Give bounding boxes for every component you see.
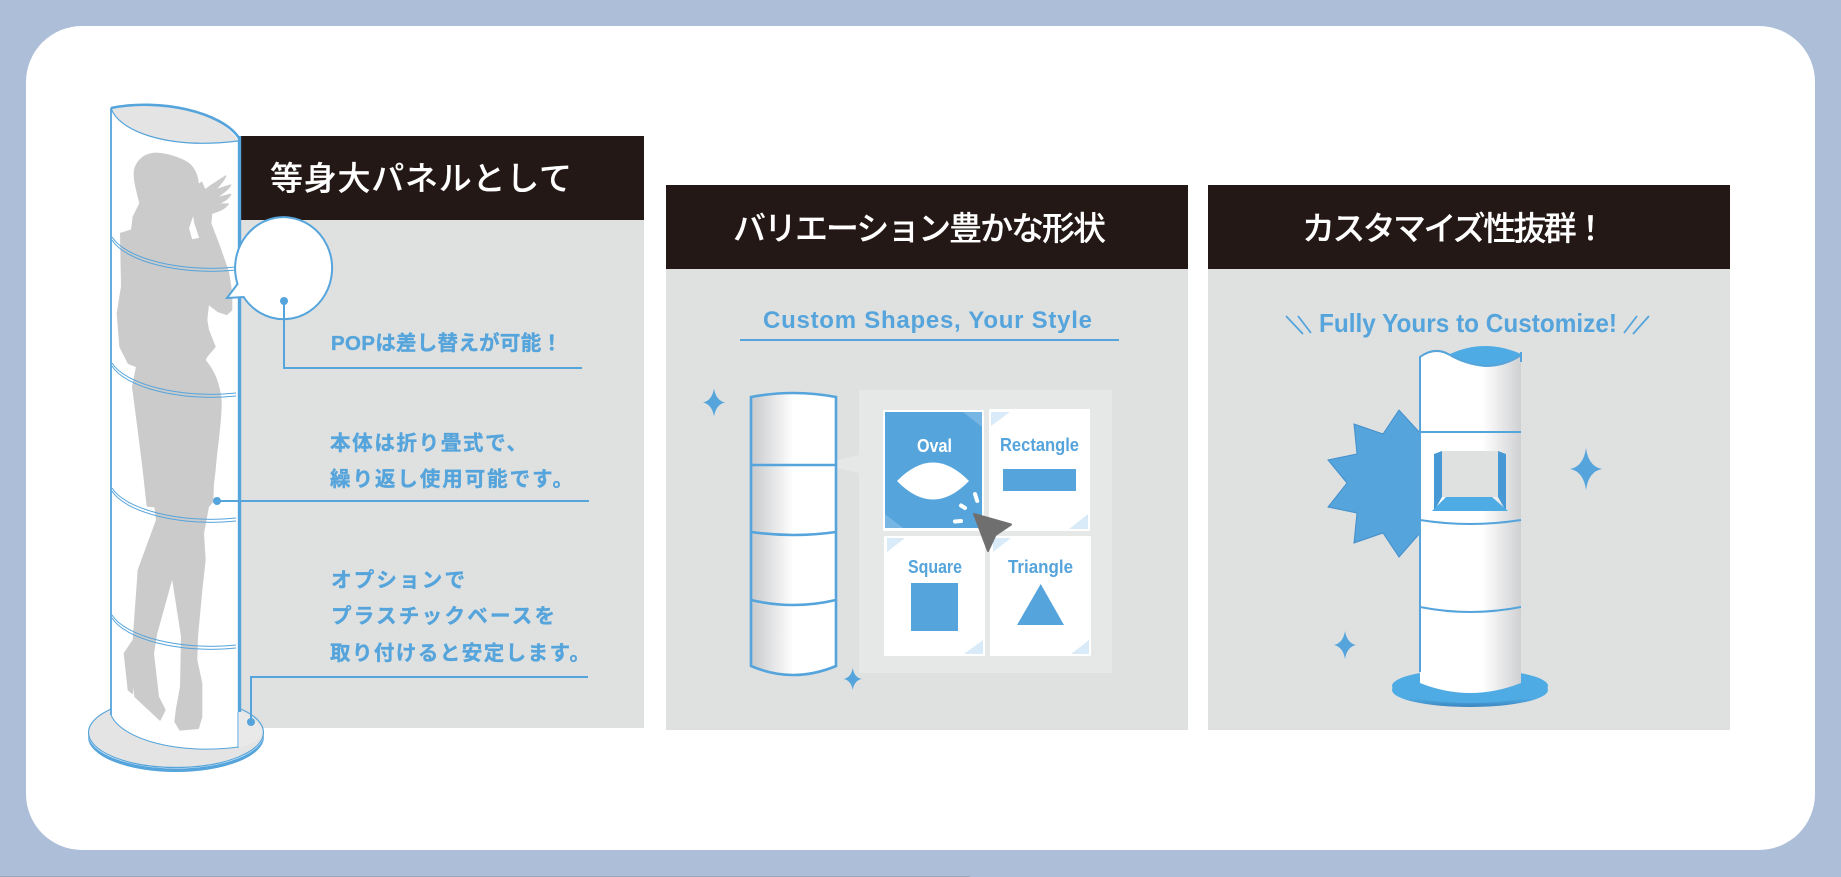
panel 2 heading: バリエーション豊かな形状 bbox=[733, 210, 1106, 247]
subtitle underline bbox=[740, 339, 1119, 341]
panel: customization bbox=[1208, 185, 1730, 730]
card: triangle bbox=[990, 536, 1091, 656]
display window bbox=[1432, 451, 1508, 511]
emphasis marks bbox=[1286, 316, 1649, 334]
panel 3 heading bar bbox=[1208, 185, 1730, 269]
shape picker background bbox=[837, 390, 1112, 673]
panel 1 heading: 等身大パネルとして bbox=[270, 160, 572, 197]
panel 3 heading: カスタマイズ性抜群！ bbox=[1302, 210, 1607, 247]
panel 2 subtitle: Custom Shapes, Your Style bbox=[763, 307, 1092, 334]
panel 1 body bbox=[241, 220, 644, 728]
panel: life-size panel bbox=[241, 136, 644, 728]
note: POP replaceable: POPは差し替えが可能！ bbox=[331, 331, 562, 355]
note: plastic base option bbox=[330, 569, 590, 665]
pillar segment joints bbox=[112, 237, 236, 649]
note: foldable body: 本体は折り畳式で、 bbox=[330, 432, 527, 455]
card: square bbox=[884, 536, 985, 656]
panel 1 heading bar bbox=[241, 136, 644, 220]
card: rectangle: Rectangle bbox=[1000, 435, 1079, 455]
illustration: pillar with silhouette bbox=[88, 105, 589, 772]
note: foldable body: 繰り返し使用可能です。 bbox=[330, 468, 573, 491]
panel: shape variations bbox=[666, 185, 1188, 730]
leader line: POP bbox=[280, 297, 582, 368]
note: plastic base option: 取り付けると安定します。 bbox=[330, 642, 590, 665]
click marks bbox=[955, 494, 977, 522]
panel 3 body bbox=[1208, 269, 1730, 730]
note: foldable body bbox=[330, 432, 573, 491]
pillar body bbox=[111, 105, 239, 749]
speech bubble POP bbox=[227, 217, 332, 319]
card: square: Square bbox=[908, 557, 962, 577]
base disc bbox=[1392, 669, 1548, 707]
card: oval bbox=[883, 410, 984, 531]
cursor arrow bbox=[974, 514, 1011, 551]
leader line: body bbox=[213, 497, 589, 505]
note: plastic base option: プラスチックベースを bbox=[331, 605, 555, 628]
card: triangle: Triangle bbox=[1008, 557, 1073, 577]
pillar base bbox=[88, 698, 264, 772]
woman silhouette bbox=[117, 153, 232, 730]
panel 2 body bbox=[666, 269, 1188, 730]
note: plastic base option: オプションで bbox=[331, 569, 465, 592]
pillar edges bbox=[111, 105, 240, 749]
sparkle bbox=[703, 388, 725, 416]
card: rectangle bbox=[989, 409, 1090, 531]
panel 2 heading bar bbox=[666, 185, 1188, 269]
sparkle bbox=[1570, 448, 1602, 490]
starburst bbox=[1328, 410, 1420, 557]
card: oval: Oval bbox=[917, 436, 952, 456]
sparkle bbox=[844, 668, 862, 690]
leader line: base bbox=[247, 677, 588, 726]
segmented pillar bbox=[751, 393, 836, 675]
customizable pillar bbox=[1419, 346, 1521, 693]
panel 3 subtitle: Fully Yours to Customize! bbox=[1319, 308, 1617, 338]
pillar top opening bbox=[111, 105, 238, 143]
sparkle bbox=[1334, 631, 1356, 659]
